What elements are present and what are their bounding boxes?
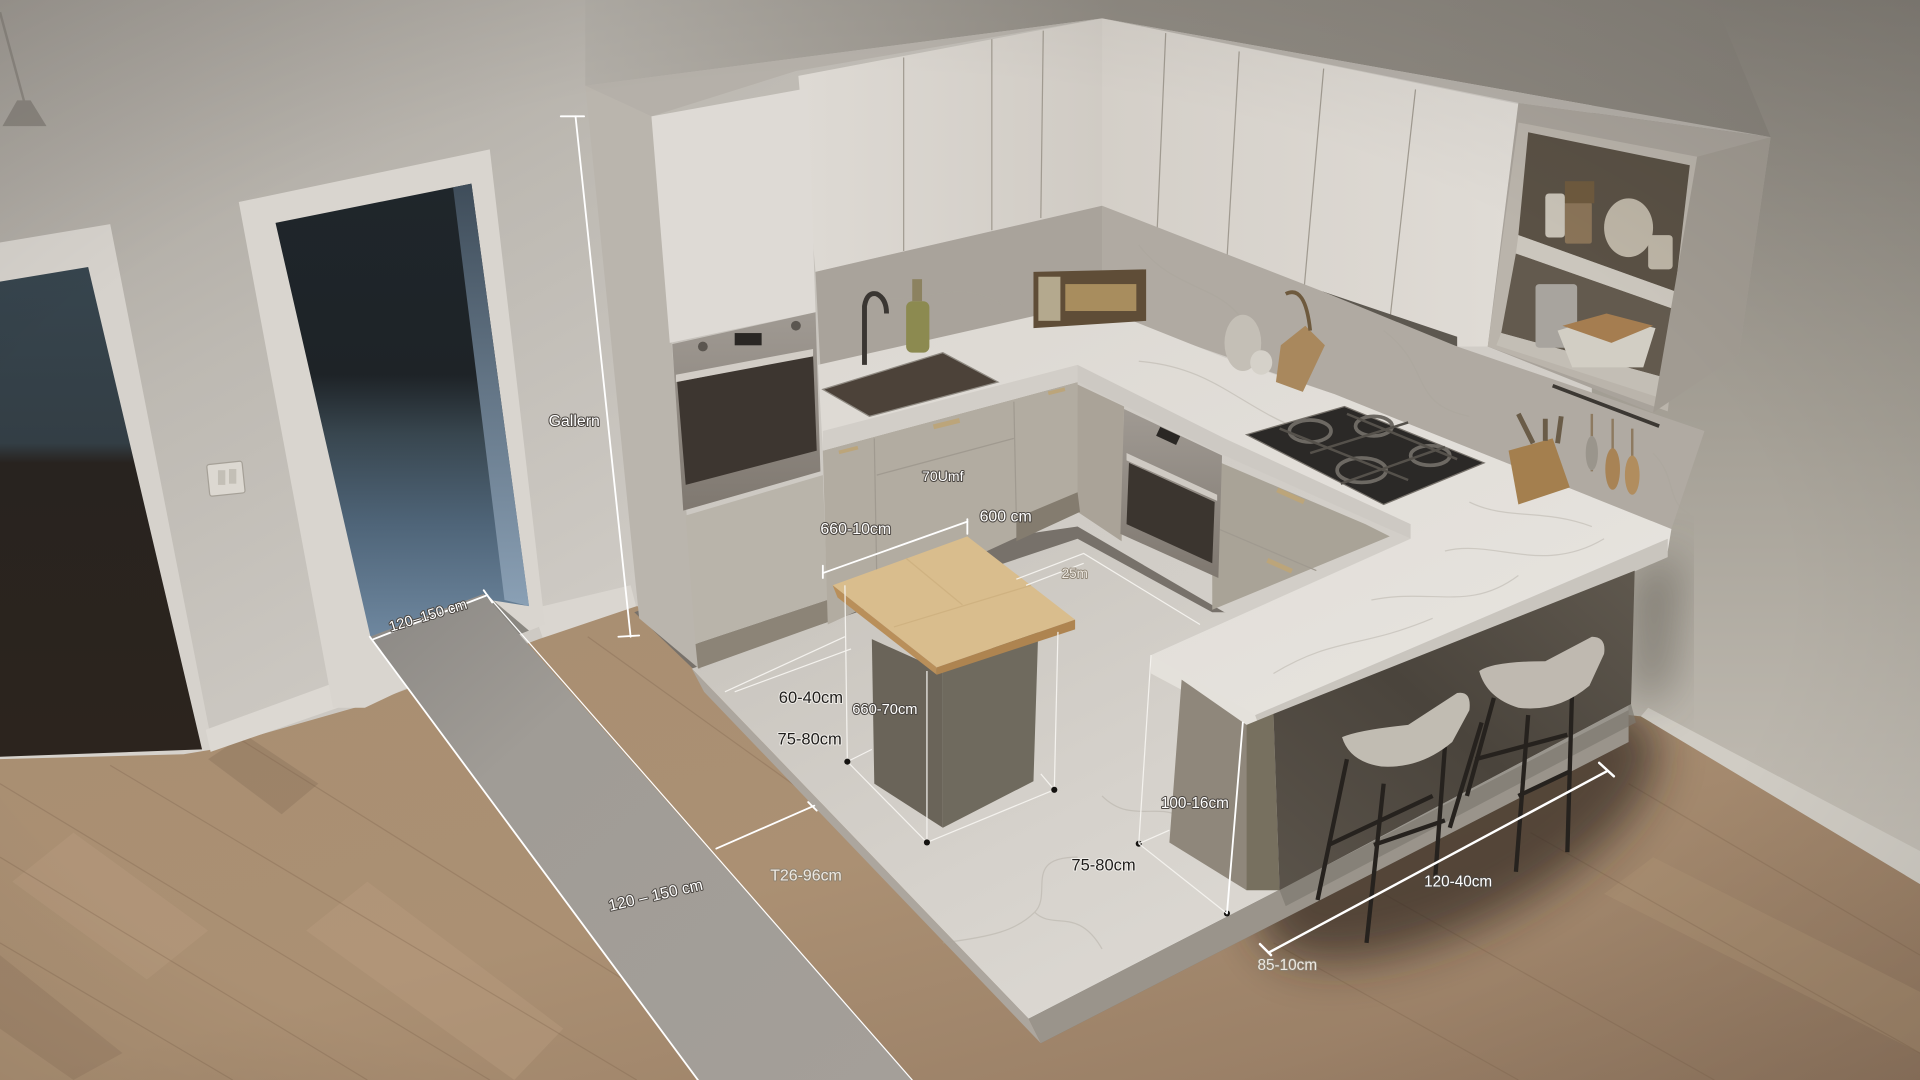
peninsula base — [1169, 571, 1636, 906]
dimension lines — [370, 116, 1614, 1080]
countertop — [818, 309, 1671, 732]
label: rear aisle: 25m — [1062, 566, 1088, 581]
pendant lamp — [0, 12, 47, 126]
main doorway with frame — [239, 149, 545, 708]
label: island depth: 600 cm — [980, 509, 1032, 526]
label: island width: 660-10cm — [820, 521, 891, 538]
dimension: peninsula length — [1260, 763, 1614, 955]
gas hob — [1247, 407, 1484, 504]
dimension: island footprint — [845, 585, 1058, 842]
cabinet top surface — [585, 18, 1771, 137]
sink and faucet — [823, 294, 998, 416]
footprint markers — [844, 759, 1230, 917]
dimension: aisle rear — [725, 553, 1200, 692]
hanging utensils and crock — [1509, 386, 1659, 504]
dimension: tall unit height — [561, 116, 639, 637]
grey walkway strip — [370, 594, 912, 1080]
marble floor platform — [634, 527, 1629, 1043]
built-in oven upper — [672, 312, 820, 511]
bar stools — [1318, 637, 1604, 943]
dimension: walkway edges — [370, 595, 912, 1080]
label: island clearance: 75-80cm — [778, 729, 842, 748]
tall cabinet lower door and plinth — [686, 475, 828, 669]
label: peninsula length: 120-40cm — [1424, 874, 1492, 891]
tall cabinet side panel — [585, 86, 700, 670]
label: peninsula height: 100-16cm — [1161, 795, 1229, 812]
dimension: aisle to platform — [716, 802, 817, 849]
shelf items — [1536, 181, 1673, 367]
base cabinets — [823, 382, 1390, 624]
label: island side: 60-40cm — [779, 688, 843, 707]
label: island height: 660-70cm — [852, 702, 918, 718]
open shelf unit — [1488, 103, 1771, 413]
label: aisle clearance: T26-96cm — [770, 867, 842, 884]
upper wall cabinets — [798, 18, 1518, 347]
left doorway to dark room — [0, 224, 338, 759]
dimension: peninsula clearance — [1139, 655, 1227, 913]
label: upper middle: 70Umf — [922, 468, 964, 484]
label: peninsula end: 85-10cm — [1258, 957, 1317, 974]
label: peninsula clearance: 75-80cm — [1071, 856, 1136, 875]
dimension labels — [387, 413, 1492, 974]
label: doorway width: 120–150 cm — [387, 597, 469, 636]
backsplash — [816, 206, 1704, 529]
island butcher-block top — [833, 536, 1075, 675]
wood floor — [0, 588, 1920, 1080]
under-counter oven — [1120, 409, 1222, 578]
canisters and chopping boards — [1224, 292, 1325, 392]
wall light switch — [207, 461, 245, 496]
oil bottle — [906, 279, 929, 353]
countertop appliance — [1033, 269, 1146, 328]
label: walkway width: 120 – 150 cm — [607, 877, 705, 915]
dimension: island width — [823, 519, 967, 578]
tall cabinet upper door — [651, 88, 816, 343]
island body — [872, 627, 1038, 828]
dimension: doorway width — [373, 590, 492, 639]
label: tall unit: Gallern — [549, 413, 600, 430]
